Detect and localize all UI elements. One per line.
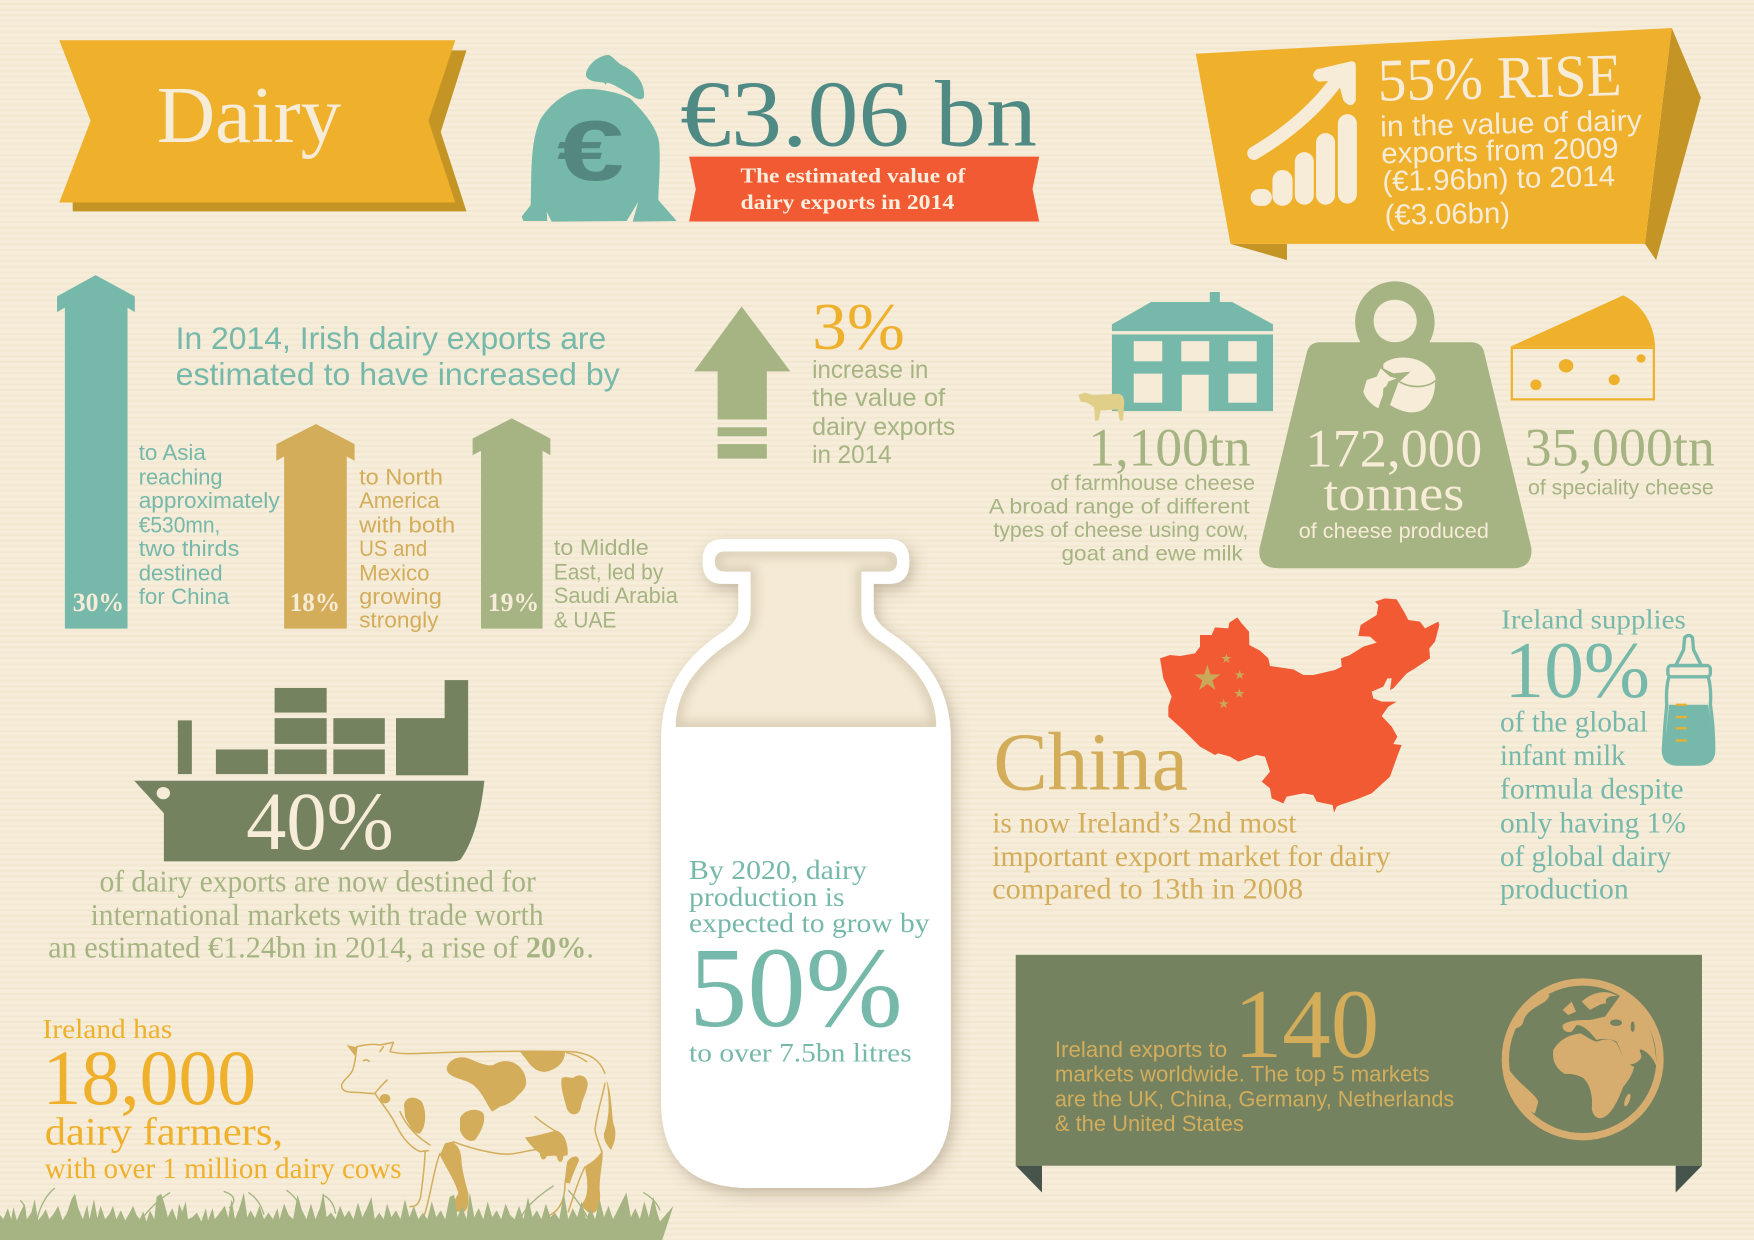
stat: 3% increase: the value of <box>812 385 945 412</box>
text: Asia: two thirds <box>139 536 239 561</box>
text: Asia: €530mn, <box>139 512 220 537</box>
text: infant formula <box>1500 605 1686 905</box>
text: Middle East: to Middle <box>554 535 649 560</box>
text: China second market <box>992 716 1391 905</box>
stat: speciality cheese: of speciality cheese <box>1528 475 1714 499</box>
text: infant formula: of the global <box>1500 707 1648 739</box>
text: production forecast: 50% <box>689 924 903 1051</box>
panel: weight with 172,000 tonnes: of cheese produced <box>1299 519 1489 543</box>
text: China second market: China <box>993 716 1188 808</box>
panel: 140 markets ribbon <box>1016 955 1702 1192</box>
title banner: Dairy <box>59 40 466 211</box>
text: North America: to North <box>359 464 443 489</box>
arrow: 18% to North America: 18% <box>290 587 340 617</box>
text: infant formula: Ireland supplies <box>1501 605 1686 636</box>
icon: globe <box>1505 982 1660 1137</box>
title banner: Dairy: Dairy <box>157 71 341 160</box>
panel: weight with 172,000 tonnes: 172,000 <box>1305 418 1482 478</box>
panel: 55% rise ribbon: (€1.96bn) to 2014 <box>1382 161 1615 198</box>
stat: 3% increase: 3% <box>812 289 905 364</box>
text: North America: Mexico <box>359 561 430 586</box>
stat: 18,000 dairy farmers: 18,000 <box>43 1034 256 1121</box>
stat: farmhouse cheese: A broad range of different <box>989 494 1250 518</box>
arrow: 19% to Middle East <box>473 418 550 629</box>
arrow: 19% to Middle East: 19% <box>488 587 539 617</box>
red ribbon caption: dairy exports in 2014 <box>741 190 955 214</box>
panel: 55% rise ribbon <box>1196 28 1701 260</box>
heading: export increases <box>176 321 620 392</box>
text: production forecast: production is <box>689 882 845 913</box>
text: markets: are the UK, China, Germany, Netherlands <box>1055 1086 1454 1111</box>
panel: milk bottle <box>661 539 951 1188</box>
panel: 55% rise ribbon: in the value of dairy <box>1380 105 1643 143</box>
icon: container ship with 40% <box>134 680 484 867</box>
text: Middle East: Saudi Arabia <box>554 583 678 608</box>
icon: baby bottle <box>1663 635 1714 764</box>
text: North America <box>358 464 455 633</box>
icon: green up arrow <box>694 307 790 459</box>
text: Asia: to Asia <box>139 440 206 465</box>
text: markets <box>1055 970 1454 1136</box>
text: China second market: important export market for dairy <box>992 841 1391 873</box>
icon: money bag with euro <box>522 55 677 222</box>
text: infant formula: 10% <box>1505 626 1650 715</box>
text: Middle East: & UAE <box>554 608 616 633</box>
arrow: 30% to Asia: 30% <box>73 587 124 617</box>
panel: 55% rise ribbon: (€3.06bn) <box>1384 198 1510 232</box>
text: infant formula: of global dairy <box>1500 841 1672 873</box>
text: Asia: for China <box>139 584 230 609</box>
text: international markets <box>48 865 594 965</box>
stat: 3% increase <box>812 289 955 469</box>
text: Middle East <box>554 535 678 633</box>
stat: farmhouse cheese: goat and ewe milk <box>1062 541 1243 565</box>
text: markets: 140 <box>1234 970 1379 1079</box>
text: China second market: is now Ireland’s 2nd most <box>992 807 1296 839</box>
headline value: €3.06 bn: €3.06 bn <box>680 62 1037 166</box>
heading: export increases: In 2014, Irish dairy exports are <box>176 321 606 356</box>
arrow: 30% to Asia <box>57 275 135 629</box>
text: infant formula: production <box>1500 873 1629 905</box>
text: North America: with both <box>358 512 455 537</box>
icon: container ship with 40%: 40% <box>246 775 394 867</box>
text: international markets: of dairy exports are now destined for <box>100 865 536 899</box>
text: North America: America <box>359 488 440 513</box>
text: international markets: international markets with trade worth <box>91 898 544 932</box>
text: China second market: compared to 13th in 2008 <box>992 873 1303 905</box>
text: North America: strongly <box>359 608 439 633</box>
text: international markets: an estimated €1.24bn in 2014, a rise of 20%. <box>48 931 594 965</box>
icon: cheese wheel <box>1363 358 1436 412</box>
text: markets: Ireland exports to <box>1055 1037 1227 1062</box>
red ribbon caption: The estimated value of <box>741 163 966 187</box>
decoration: grass <box>0 1186 673 1240</box>
text: North America: growing <box>359 584 442 609</box>
stat: farmhouse cheese: of farmhouse cheese <box>1050 471 1255 495</box>
text: production forecast: expected to grow by <box>689 908 930 939</box>
text: Asia: reaching <box>139 464 223 489</box>
panel: 55% rise ribbon: exports from 2009 <box>1381 133 1619 170</box>
stat: 3% increase: increase in <box>812 357 928 384</box>
text: Middle East: East, led by <box>554 559 664 584</box>
stat: 18,000 dairy farmers: with over 1 million dairy cows <box>45 1153 402 1185</box>
text: markets: & the United States <box>1055 1111 1244 1136</box>
stat: speciality cheese: 35,000tn <box>1525 417 1715 477</box>
text: North America: US and <box>359 536 427 561</box>
text: production forecast: By 2020, dairy <box>689 855 867 886</box>
stat: 18,000 dairy farmers: dairy farmers, <box>45 1110 283 1153</box>
stat: farmhouse cheese: types of cheese using cow, <box>993 518 1248 542</box>
text: markets: markets worldwide. The top 5 markets <box>1055 1062 1430 1087</box>
icon: rising chart and arrow <box>1251 61 1357 206</box>
red ribbon caption <box>689 157 1039 221</box>
stat: 3% increase: dairy exports <box>812 414 955 441</box>
text: production forecast: to over 7.5bn litres <box>689 1038 912 1068</box>
text: Asia <box>139 440 280 609</box>
text: Asia: approximately <box>139 488 280 513</box>
stat: 3% increase: in 2014 <box>812 442 892 469</box>
icon: farmhouse <box>1112 292 1273 411</box>
icon: cow illustration <box>342 1042 615 1218</box>
heading: export increases: estimated to have increased by <box>176 357 620 392</box>
stat: farmhouse cheese <box>989 417 1255 565</box>
text: production forecast <box>689 855 930 1068</box>
icon: small cow <box>1078 393 1124 421</box>
text: infant formula: formula despite <box>1500 774 1684 806</box>
text: Asia: destined <box>139 561 223 586</box>
stat: 18,000 dairy farmers <box>43 1014 402 1185</box>
text: infant formula: infant milk <box>1500 740 1626 772</box>
stat: 18,000 dairy farmers: Ireland has <box>43 1014 172 1045</box>
text: infant formula: only having 1% <box>1500 807 1686 839</box>
arrow: 18% to North America <box>276 424 355 629</box>
panel: 55% rise ribbon: 55% RISE <box>1377 42 1622 115</box>
icon: cheese wedge <box>1510 295 1655 399</box>
panel: weight with 172,000 tonnes: tonnes <box>1323 466 1464 521</box>
icon: money bag with euro: € <box>557 104 624 199</box>
map: China with stars <box>1160 598 1439 813</box>
stat: farmhouse cheese: 1,100tn <box>1088 417 1251 477</box>
panel: weight with 172,000 tonnes <box>1259 281 1531 568</box>
